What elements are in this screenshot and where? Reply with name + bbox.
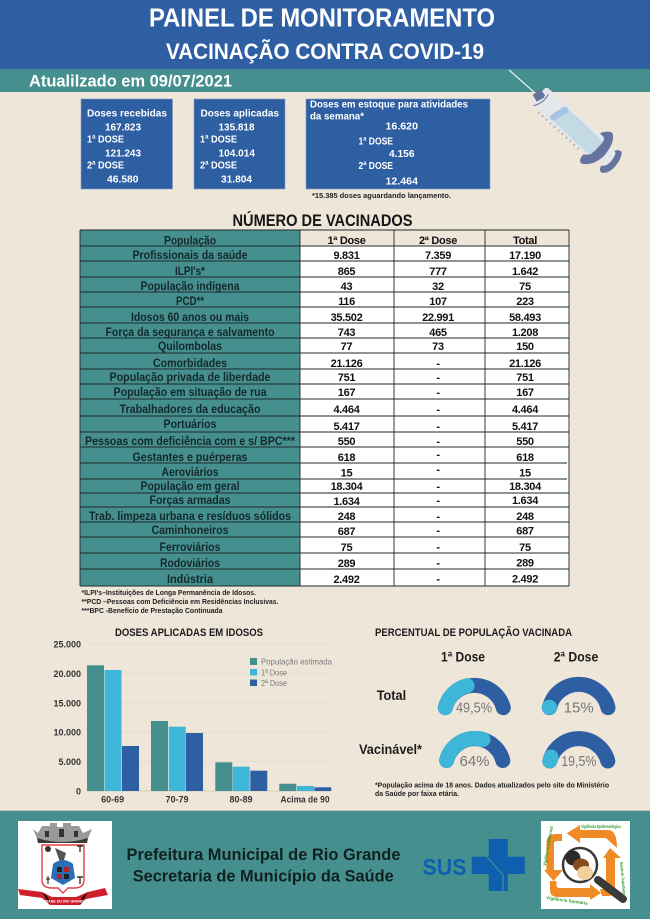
legend: População estimada [261,656,332,666]
table footnotes: **PCD –Pessoas com Deficiência em Residências Inclusivas. [82,599,279,606]
label and values: 16.620 [386,122,418,132]
row: populacao em situacao de rua [114,387,534,399]
row: populacao indigena [140,281,531,293]
bar chart: doses aplicadas em idosos [53,640,332,804]
row: populacao em geral: População em geral [140,481,240,493]
row: gestantes e puerperas: 618 [516,452,534,464]
row: portuarios [164,419,538,433]
row: ilpis: ILPI's* [175,266,205,278]
table footnotes: ***BPC -Benefício de Prestação Continuada [82,608,223,615]
row: industria: - [436,574,440,586]
row: industria: 2.492 [512,574,538,586]
column heading: 1a dose: 1ª Dose [441,650,485,664]
row: rodoviarios: 289 [338,558,355,570]
panel: doses aplicadas [194,99,285,189]
row: pessoas com deficiencia: 550 [516,436,534,448]
logo labels: Vigilância Epidemiológica [581,824,622,829]
header banner [0,0,650,69]
row: header [164,235,537,248]
row: idosos: 58.493 [509,312,541,324]
label and values [200,108,279,186]
row: caminhoneiros [152,525,534,538]
row: aeroviarios [162,464,531,480]
x axis labels: Acima de 90 [280,794,330,804]
row: pcd: 107 [429,296,447,308]
stock footnote: *15.385 doses aguardando lançamento. [312,193,451,200]
row: header: População [164,236,216,248]
row: forca da seguranca: 1.208 [512,327,538,339]
label and values: da semana* [310,112,364,122]
label and values: 104.014 [218,148,255,160]
row: trab limpeza urbana: 248 [516,511,534,523]
row: caminhoneiros: Caminhoneiros [152,525,228,537]
row: comorbidades: 21.126 [331,358,363,370]
row: idosos: Idosos 60 anos ou mais [131,312,249,324]
heading: percentual de populacao vacinada: PERCENTUAL DE POPULAÇÃO VACINADA [375,626,572,639]
row: rodoviarios: - [436,558,440,570]
row: comorbidades: - [436,358,440,370]
row: trabalhadores da educacao: - [436,404,440,416]
row: populacao em situacao de rua: 167 [516,387,534,399]
crest motto: CIDADE DO RIO GRANDE [42,900,87,904]
row: header: 2ª Dose [419,235,457,247]
row: populacao privada de liberdade: - [436,372,440,384]
row heading: total: Total [377,688,406,703]
row heading: vacinavel: Vacinável* [359,742,423,757]
row: ilpis: 865 [338,266,355,278]
row: forca da seguranca [106,327,538,339]
y axis labels: 10.000 [53,728,81,738]
label and values: 2ª DOSE [87,160,124,172]
row: populacao em geral: - [436,481,440,493]
row: populacao em situacao de rua: 167 [338,387,355,399]
row: aeroviarios: Aeroviários [162,467,218,479]
label and values: 2ª DOSE [200,160,237,172]
y axis labels: 5.000 [58,757,81,767]
update date band [0,69,650,92]
logo labels: Vigilância Sanitária [546,895,589,906]
label and values [87,108,167,186]
row: pcd: 223 [516,296,534,308]
logo: SUS [422,839,525,892]
table footnotes [82,590,279,615]
footer text: Prefeitura Municipal de Rio Grande [126,846,400,864]
gauge: total 1a dose [445,685,503,716]
row: ferroviarios: 75 [519,542,531,554]
y axis labels [53,640,81,796]
label and values: Doses recebidas [87,108,167,120]
y axis labels: 15.000 [53,698,81,708]
row: quilombolas: Quilombolas [158,341,222,353]
row: profissionais da saude: Profissionais da saúde [132,250,248,262]
logo: SUS: SUS [422,854,466,880]
logo labels [542,824,627,906]
row: forcas armadas: 1.634 [333,496,361,508]
label and values: 31.804 [221,174,252,186]
y axis labels: 25.000 [53,640,81,650]
row: trabalhadores da educacao: Trabalhadores da educação [120,404,260,416]
logo labels: Vigilância Ambiental [542,826,554,866]
row: ferroviarios: Ferroviários [160,542,220,554]
row: caminhoneiros: 687 [516,526,534,538]
label and values: 12.464 [386,176,418,188]
row: populacao privada de liberdade: População privada de liberdade [110,372,270,384]
row: comorbidades: 21.126 [509,358,541,370]
row: aeroviarios: - [436,464,440,476]
table footnotes: *ILPI's–Instituições de Longa Permanência de Idosos. [82,590,256,597]
row: ilpis: 1.642 [512,266,538,278]
row: forcas armadas [150,495,539,508]
gauge: total 1a dose: 49,5% [456,700,492,716]
x axis labels: 70-79 [165,794,189,804]
row: industria: 2.492 [333,574,360,586]
row: ferroviarios [160,542,531,554]
row: comorbidades: Comorbidades [153,358,227,370]
row: populacao privada de liberdade: 751 [516,372,534,384]
gauge: vacinavel 1a dose: 64% [459,753,490,770]
row: idosos: 22.991 [422,312,454,324]
legend: 2ª Dose [261,678,287,688]
row: profissionais da saude: 17.190 [509,250,541,262]
x axis labels [101,794,330,804]
label and values: 1ª DOSE [358,136,393,148]
row: industria: Indústria [167,574,214,586]
row: quilombolas: 150 [516,341,534,353]
bars: 80-89 [215,762,267,791]
row: populacao privada de liberdade [110,372,534,384]
row: portuarios: Portuários [164,419,216,431]
row: pcd: PCD** [176,296,204,308]
row: quilombolas: 73 [432,341,444,353]
label and values: 1ª DOSE [87,134,124,146]
bars: acima de 90 [279,784,331,791]
panel: doses recebidas [81,99,172,189]
row: profissionais da saude: 7.359 [425,250,451,262]
gauge: vacinavel 1a dose [447,738,503,770]
row: gestantes e puerperas: - [436,449,440,461]
row: aeroviarios: 15 [519,468,531,480]
row: populacao em situacao de rua: População em situação de rua [114,387,267,399]
row: trab limpeza urbana: - [436,511,440,523]
row: pcd [176,296,534,308]
label and values: 121.243 [105,148,141,160]
row: forca da seguranca: Força da segurança e salvamento [106,327,274,339]
row: trab limpeza urbana: Trab. limpeza urbana e resíduos sólidos [89,511,291,523]
table: numero de vacinados [80,230,569,586]
row: portuarios: 5.417 [512,421,538,433]
subtitle: VACINAÇÃO CONTRA COVID-19 [166,39,484,64]
row: portuarios: 5.417 [333,421,360,433]
row: caminhoneiros: - [436,525,440,537]
row: idosos [131,312,541,324]
row: ferroviarios: 75 [341,542,352,554]
row: populacao indigena: 32 [432,281,444,293]
legend: 1ª Dose [261,668,287,678]
logo: municipal crest [18,821,112,909]
panel: doses em estoque [306,99,490,189]
row: quilombolas [158,341,534,353]
row: header: 1ª Dose [327,235,366,247]
row: rodoviarios [160,558,534,570]
row: comorbidades [153,358,541,370]
x axis labels: 60-69 [101,794,124,804]
row: populacao em geral [140,481,542,493]
footer text: Secretaria de Município da Saúde [133,868,394,886]
footer band [0,810,650,919]
row: idosos: 35.502 [331,312,363,324]
y axis labels: 20.000 [53,669,81,679]
gauge: total 2a dose [542,684,608,716]
row: gestantes e puerperas: Gestantes e puérperas [132,452,248,464]
label and values [310,100,468,188]
row: aeroviarios: 15 [341,468,352,480]
row: populacao em geral: 18.304 [509,481,542,493]
row: populacao privada de liberdade: 751 [338,372,355,384]
row: pessoas com deficiencia: 550 [338,436,355,448]
row: pessoas com deficiencia: - [436,436,440,448]
row: caminhoneiros: 687 [338,526,355,538]
row: forcas armadas: 1.634 [512,495,539,507]
icon: syringe [509,70,622,173]
row: gestantes e puerperas: 618 [338,452,355,464]
row: populacao em geral: 18.304 [331,481,364,493]
label and values: 46.580 [107,174,139,186]
row: rodoviarios: 289 [516,558,534,570]
label and values: 2ª DOSE [358,161,393,172]
gauge footnote: *População acima de 18 anos. Dados atualizados pelo site do Ministério [375,782,609,790]
logo labels: Saúde do Trabalhador [619,862,627,896]
row: populacao em situacao de rua: - [436,387,440,399]
footer text [126,846,400,886]
row: trabalhadores da educacao: 4.464 [333,404,361,416]
bars: 70-79 [151,721,203,791]
label and values: 167.823 [105,122,141,134]
label and values: 135.818 [218,122,255,134]
row: profissionais da saude [132,250,541,262]
row: pcd: 116 [338,296,355,308]
logo: vigilancia em saude [541,821,630,909]
label and values: 1ª DOSE [200,134,237,146]
label and values: Doses em estoque para atividades [310,100,468,110]
row: forca da seguranca: 465 [429,327,447,339]
row: gestantes e puerperas [132,449,534,464]
row: ilpis [175,266,538,278]
label and values: 4.156 [389,149,415,160]
column heading: 2a dose: 2ª Dose [554,650,599,664]
row: trab limpeza urbana [89,511,534,523]
gauge: total 2a dose: 15% [564,700,594,716]
row: trabalhadores da educacao: 4.464 [512,404,539,416]
row: forcas armadas: - [436,495,440,507]
title: PAINEL DE MONITORAMENTO [149,2,495,32]
row: pessoas com deficiencia [85,436,534,448]
update date: Atualilzado em 09/07/2021 [29,72,232,90]
label and values: Doses aplicadas [200,108,279,120]
row: quilombolas: 77 [341,341,352,353]
row: trab limpeza urbana: 248 [338,511,355,523]
row: profissionais da saude: 9.831 [333,250,360,262]
y axis labels: 0 [76,786,81,796]
gauge: vacinavel 2a dose [550,739,608,770]
row: populacao indigena: População indígena [140,281,240,293]
row: pessoas com deficiencia: Pessoas com deficiência com e s/ BPC*** [85,436,295,448]
row: trabalhadores da educacao [120,404,539,416]
gauge footnote: da Saúde por faixa etária. [375,791,459,798]
row: header: Total [513,235,537,247]
row: industria [167,574,538,586]
row: rodoviarios: Rodoviários [160,558,220,570]
x axis labels: 80-89 [229,794,253,804]
heading: numero de vacinados: NÚMERO DE VACINADOS [232,211,412,230]
heading: doses aplicadas em idosos: DOSES APLICADAS EM IDOSOS [115,627,263,639]
legend [250,656,332,688]
row: populacao indigena: 75 [519,281,531,293]
bars: 60-69 [87,665,139,791]
row: populacao indigena: 43 [341,281,352,293]
gauge: vacinavel 2a dose: 19,5% [561,753,596,770]
row: ilpis: 777 [429,266,447,278]
row: portuarios: - [436,421,440,433]
row: forcas armadas: Forças armadas [150,495,230,507]
row: ferroviarios: - [436,542,440,554]
gauge footnote [375,782,609,798]
row: forca da seguranca: 743 [338,327,355,339]
